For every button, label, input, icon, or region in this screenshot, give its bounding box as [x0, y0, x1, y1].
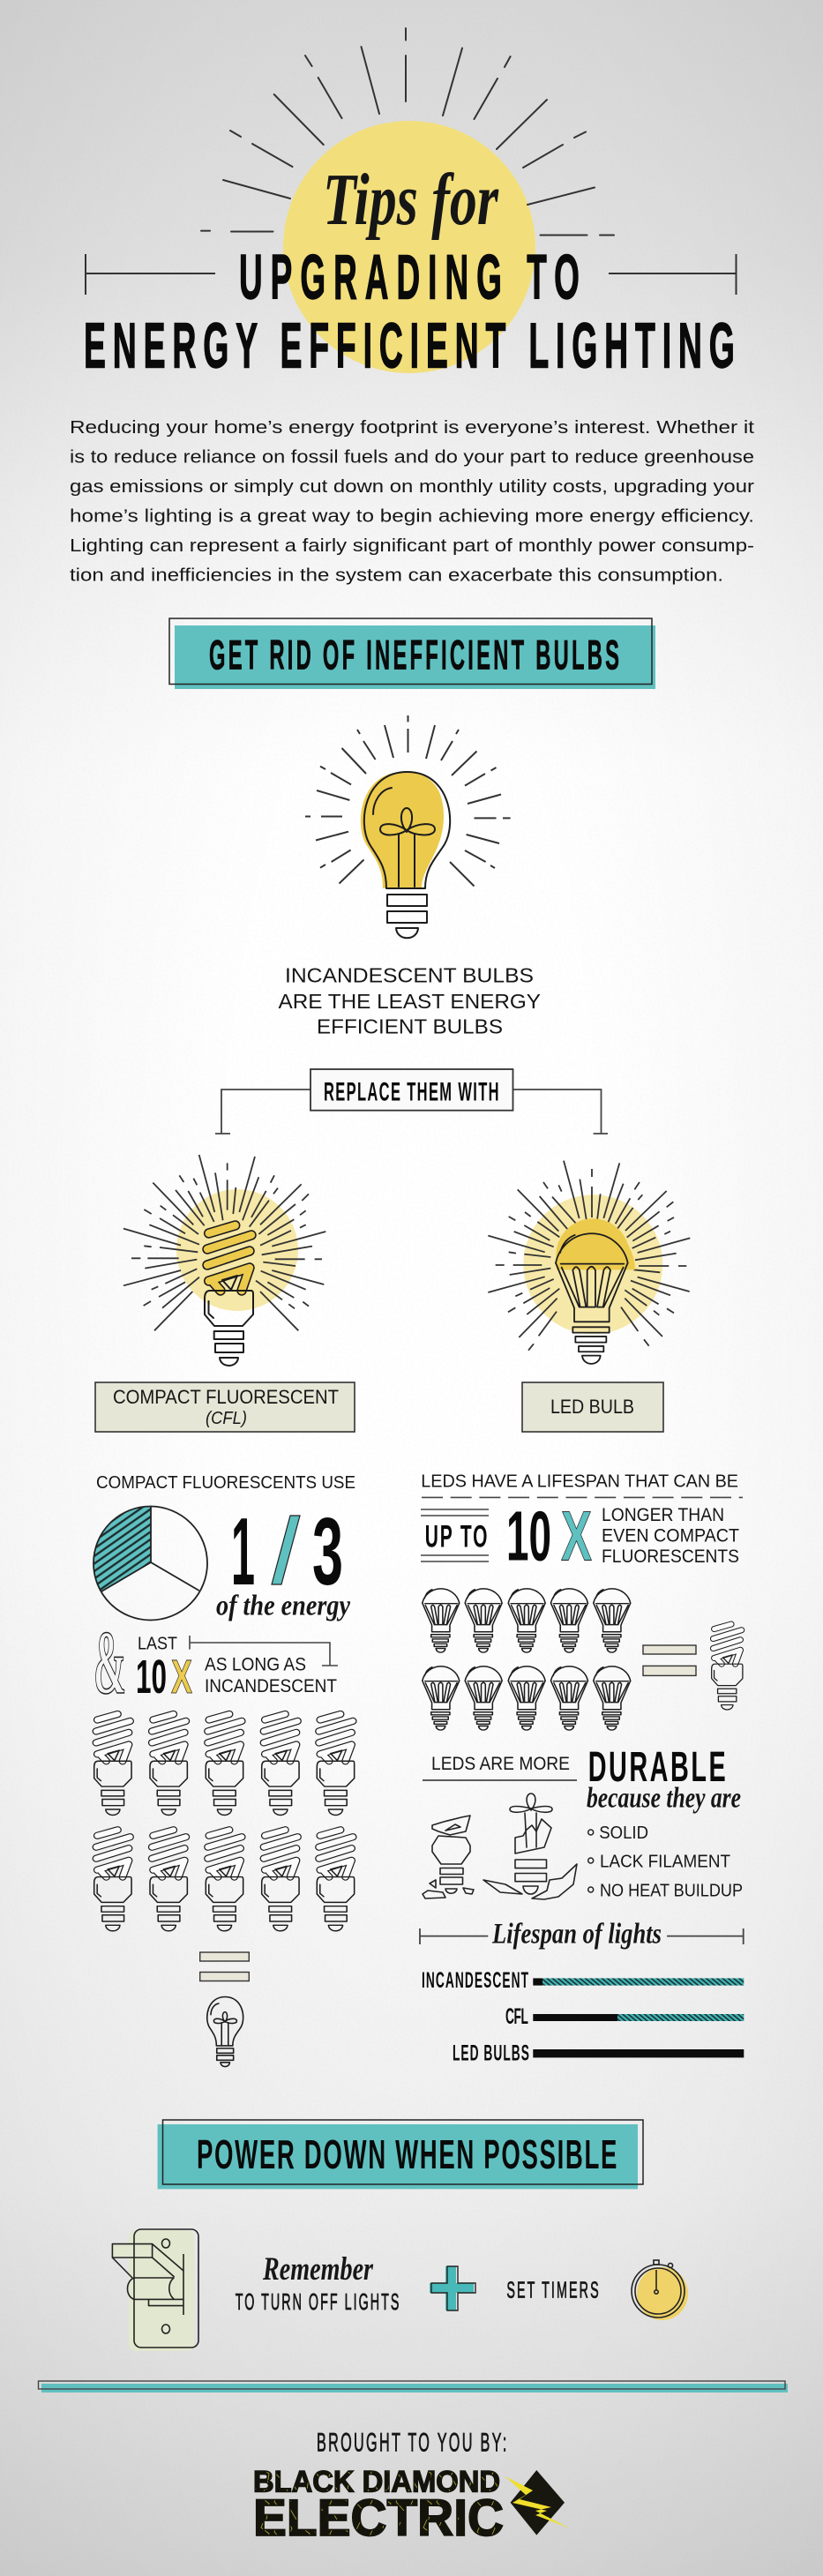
- of the energy: of the energy: [216, 1590, 350, 1621]
- lifespan heading: Lifespan of lights: [491, 1918, 662, 1950]
- durable reasons list: [588, 1823, 743, 1901]
- title line 2: ENERGY EFFICIENT LIGHTING: [84, 311, 735, 382]
- incandescent caption: INCANDESCENT BULBS: [285, 963, 534, 986]
- logo: black diamond electric: [253, 2465, 570, 2547]
- intro paragraph: [70, 417, 754, 586]
- one third figure: [231, 1498, 343, 1606]
- section banner: get rid of inefficient bulbs: GET RID OF INEFFICIENT BULBS: [209, 631, 619, 678]
- icon: timer: [632, 2260, 688, 2320]
- header sun illustration: [201, 28, 614, 373]
- up to: [421, 1509, 489, 1561]
- leds are more durable: DURABLE: [588, 1743, 726, 1791]
- left column: compact fluorescents: [94, 1473, 355, 2067]
- divider bar: [39, 2381, 788, 2393]
- 10x: 10: [506, 1496, 551, 1576]
- bar: incandescent: INCANDESCENT: [422, 1969, 528, 1993]
- bar: incandescent: [422, 1969, 744, 1993]
- icon: small incandescent bulb: [207, 1997, 243, 2067]
- intro paragraph: Reducing your home’s energy footprint is everyone’s interest. Whether it: [70, 417, 754, 438]
- label: compact fluorescent: [95, 1382, 355, 1432]
- title: [84, 159, 736, 382]
- leds are more durable: [423, 1743, 741, 1815]
- durable reasons list: SOLID: [599, 1823, 648, 1843]
- right column: LEDs: [420, 1471, 744, 2066]
- pie chart one third: [94, 1507, 207, 1620]
- icon: broken CFL: [423, 1816, 474, 1898]
- icon: broken incandescent bulb: [483, 1793, 577, 1899]
- brought to you by: BROUGHT TO YOU BY:: [317, 2429, 506, 2458]
- icon: LED bulb with rays: [488, 1161, 690, 1364]
- replace them with connector: REPLACE THEM WITH: [324, 1078, 499, 1107]
- longer than text: FLUORESCENTS: [602, 1546, 739, 1567]
- icon: light switch: [112, 2229, 198, 2351]
- last 10x as long as incandescent: AS LONG AS: [205, 1654, 306, 1674]
- title script line: Tips for: [323, 159, 499, 241]
- incandescent caption: EFFICIENT BULBS: [317, 1015, 503, 1038]
- incandescent caption: [279, 963, 541, 1038]
- last 10x as long as incandescent: 10: [136, 1651, 167, 1704]
- bar: CFL: CFL: [505, 2005, 528, 2029]
- intro paragraph: tion and inefficiencies in the system can exacerbate this consumption.: [70, 565, 723, 586]
- bar: LED bulbs: LED BULBS: [453, 2042, 529, 2066]
- icon: small CFL bulb: [712, 1624, 743, 1710]
- left column: compact fluorescents: &: [94, 1613, 126, 1713]
- bar: LED bulbs: [453, 2042, 744, 2066]
- lifespan bar chart: [422, 1969, 744, 2066]
- label: compact fluorescent: (CFL): [206, 1409, 247, 1428]
- icon grid: ten CFL bulbs: [94, 1714, 355, 1931]
- intro paragraph: is to reduce reliance on fossil fuels and do your part to reduce greenhouse: [70, 446, 754, 468]
- section banner: power down when possible: [158, 2120, 643, 2189]
- longer than text: [602, 1505, 739, 1567]
- one third figure: 1: [231, 1498, 255, 1606]
- up to: UP TO: [425, 1520, 488, 1554]
- last 10x as long as incandescent: X: [171, 1651, 192, 1704]
- equals sign: [643, 1645, 696, 1675]
- cfl heading: COMPACT FLUORESCENTS USE: [96, 1473, 355, 1493]
- logo: black diamond electric: BLACK DIAMOND: [253, 2465, 500, 2498]
- logo: black diamond electric: ELECTRIC: [253, 2490, 504, 2547]
- sun circle: [283, 121, 535, 373]
- title line 1 with side brackets: [86, 243, 736, 312]
- leds are more durable: LEDS ARE MORE: [431, 1754, 570, 1774]
- last 10x as long as incandescent: [136, 1635, 338, 1704]
- longer than text: LONGER THAN: [602, 1505, 724, 1525]
- remember to turn off lights: TO TURN OFF LIGHTS: [236, 2290, 399, 2315]
- replace them with connector: [215, 1069, 608, 1134]
- durable reasons list: NO HEAT BUILDUP: [600, 1882, 743, 1901]
- remember to turn off lights: Remember: [262, 2251, 373, 2288]
- section banner: power down when possible: POWER DOWN WHEN POSSIBLE: [197, 2133, 617, 2178]
- icon: compact fluorescent bulb with rays: [123, 1155, 325, 1366]
- icon grid: ten LED bulbs: [423, 1589, 631, 1730]
- label: LED bulb: LED BULB: [550, 1396, 634, 1418]
- set timers text: SET TIMERS: [506, 2278, 599, 2303]
- remember to turn off lights: [236, 2251, 399, 2315]
- last 10x as long as incandescent: INCANDESCENT: [205, 1676, 337, 1696]
- durable reasons list: LACK FILAMENT: [600, 1853, 730, 1872]
- one third figure: 3: [312, 1498, 343, 1606]
- bar: CFL: [505, 2005, 744, 2029]
- intro paragraph: gas emissions or simply cut down on monthly utility costs, upgrading your: [70, 476, 754, 497]
- intro paragraph: home’s lighting is a great way to begin achieving more energy efficiency.: [70, 506, 754, 526]
- lifespan heading: [420, 1918, 744, 1950]
- intro paragraph: Lighting can represent a fairly significant part of monthly power consump-: [70, 535, 754, 556]
- title line 1 with side brackets: UPGRADING TO: [239, 243, 580, 312]
- led heading: LEDS HAVE A LIFESPAN THAT CAN BE: [421, 1471, 738, 1491]
- last 10x as long as incandescent: LAST: [138, 1635, 177, 1654]
- sun rays: [201, 28, 614, 235]
- equals sign: [200, 1952, 249, 1981]
- section banner: get rid of inefficient bulbs: [169, 618, 655, 689]
- label: compact fluorescent: COMPACT FLUORESCENT: [113, 1386, 339, 1408]
- label: LED bulb: [522, 1382, 663, 1432]
- 10x: X: [561, 1496, 592, 1576]
- icon: plus sign: [430, 2266, 475, 2310]
- incandescent caption: ARE THE LEAST ENERGY: [279, 990, 541, 1013]
- icon: incandescent bulb with rays: [305, 715, 511, 938]
- longer than text: EVEN COMPACT: [602, 1525, 739, 1546]
- leds are more durable: because they are: [587, 1783, 741, 1815]
